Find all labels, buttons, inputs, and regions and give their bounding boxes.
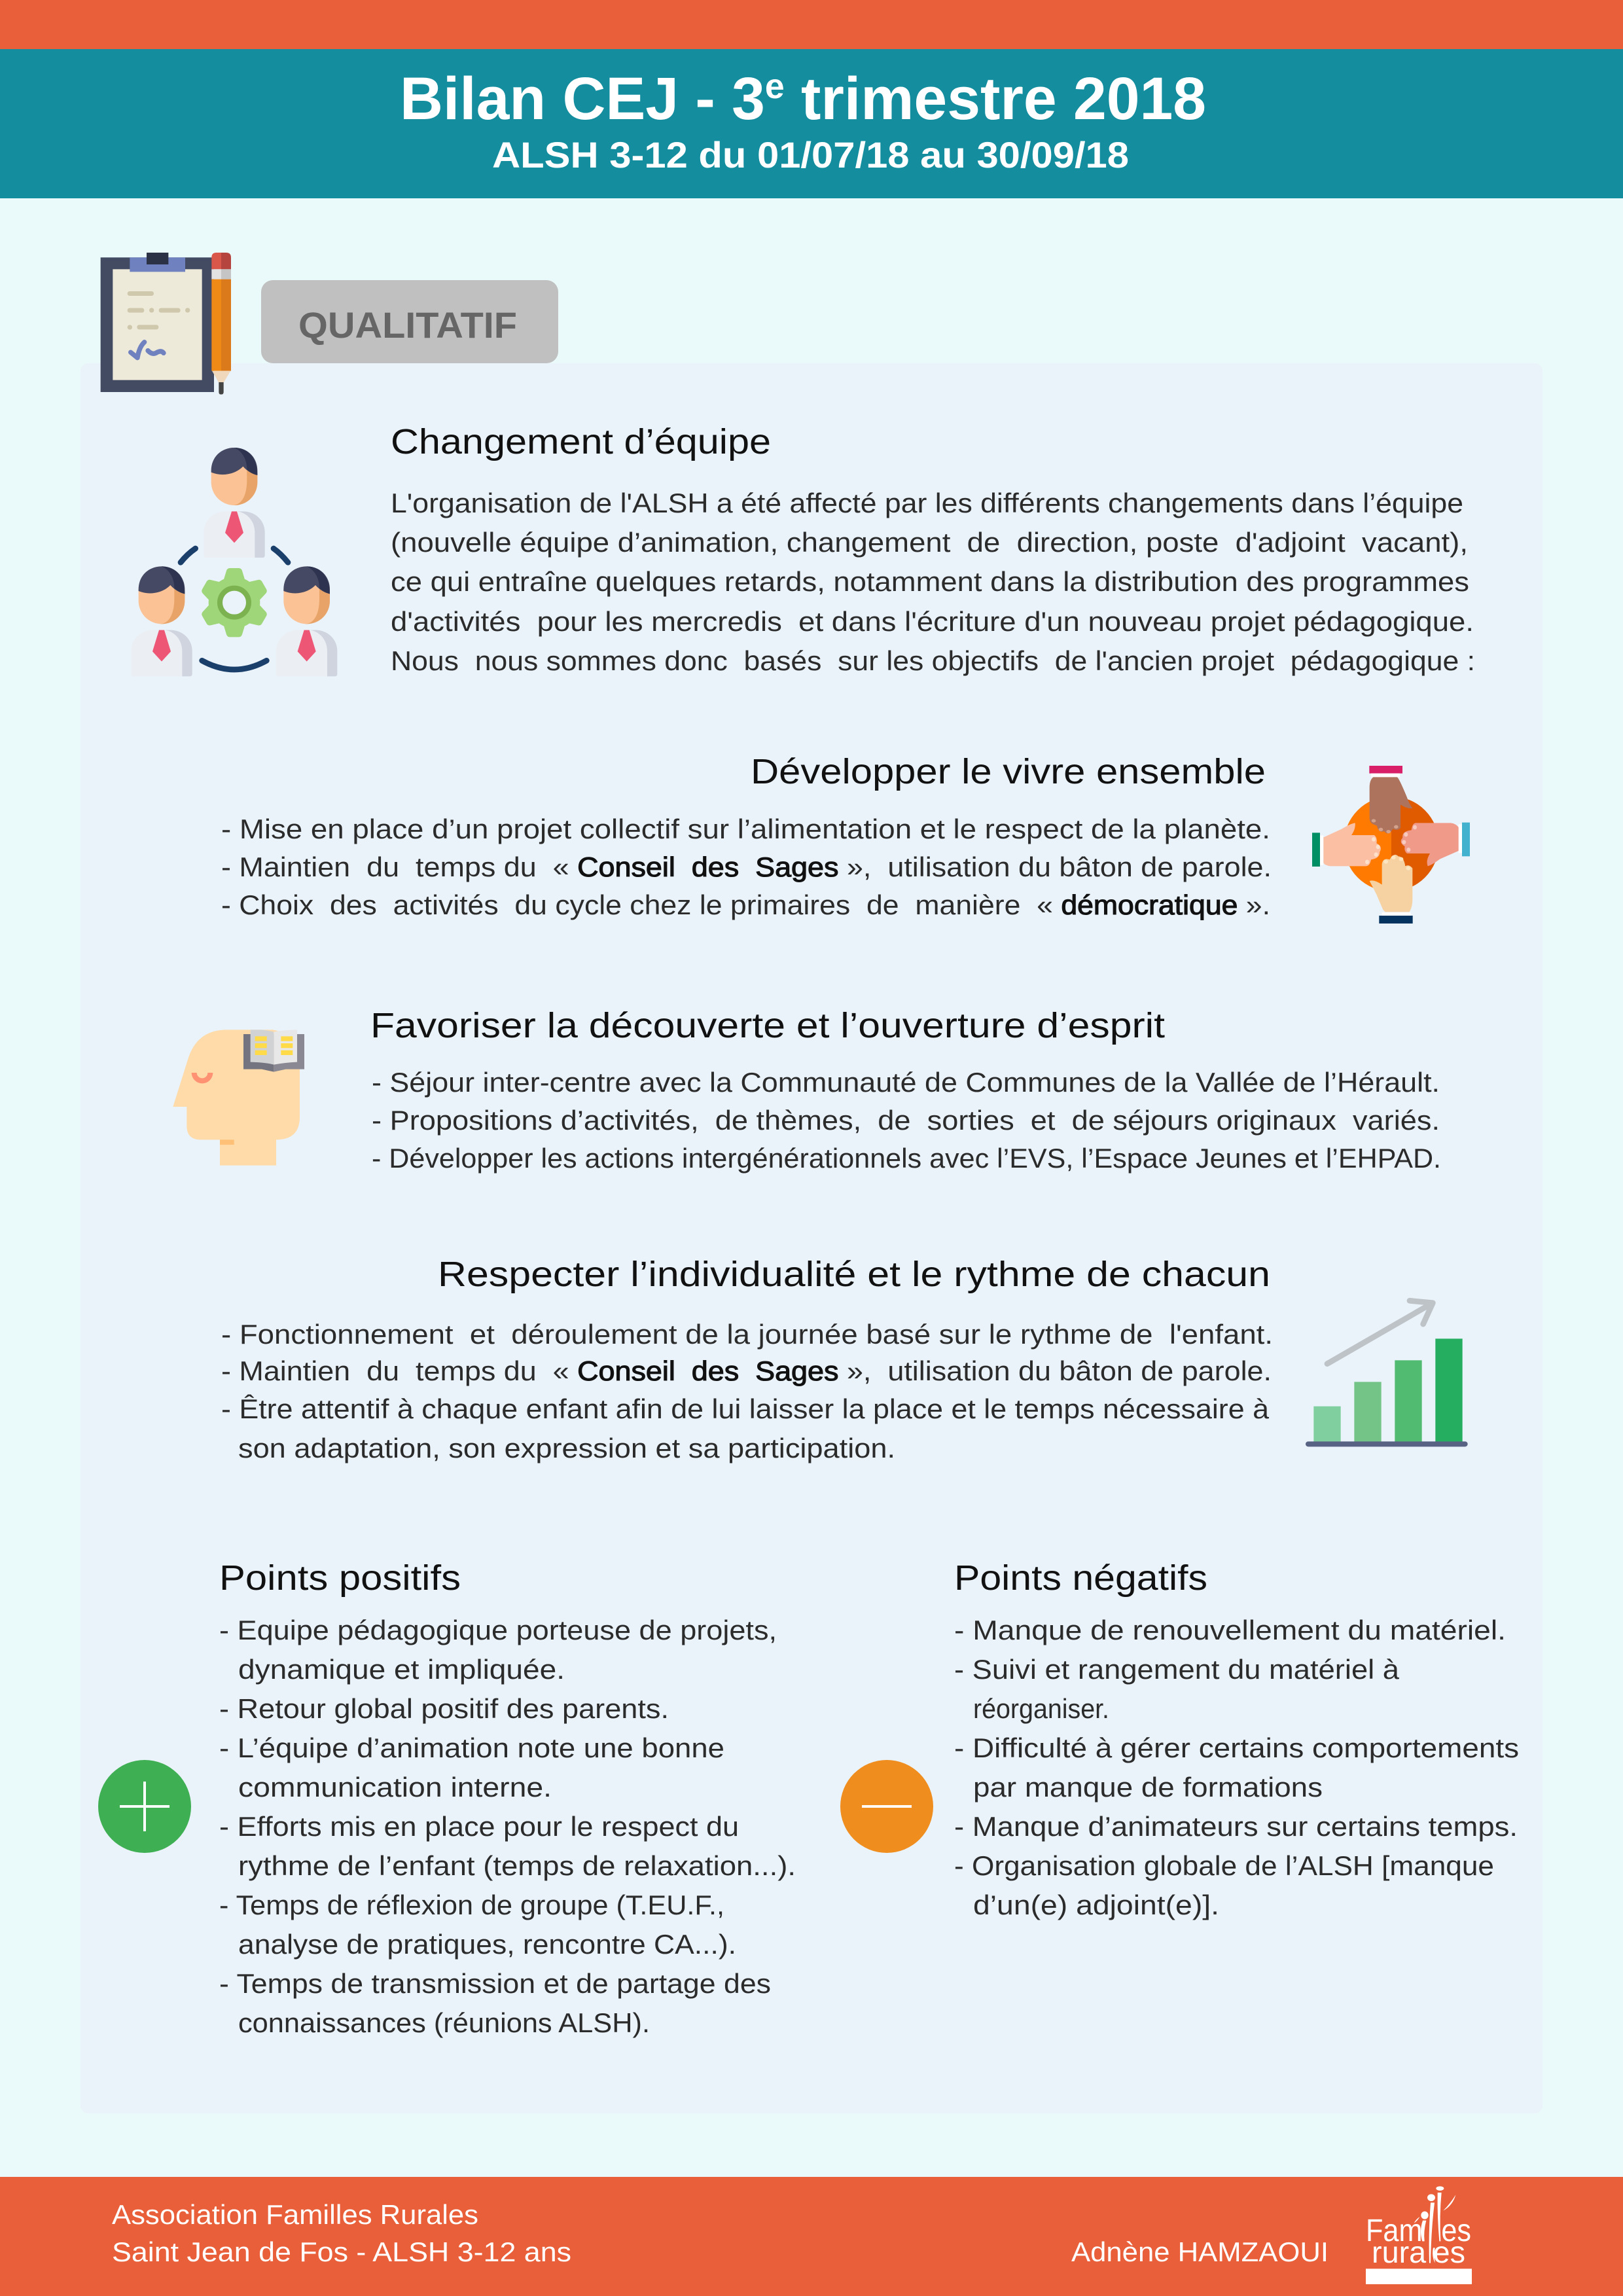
heading: Développer le vivre ensemble	[751, 752, 1266, 791]
bullet list: - Maintien du temps du « Conseil des Sages », utilisation du bâton de parole.	[221, 852, 1272, 882]
bullet list: - Propositions d’activités, de thèmes, de sorties et de séjours originaux variés.	[372, 1105, 1440, 1136]
logo	[1366, 2186, 1472, 2284]
points negatifs	[954, 1558, 1519, 1920]
list: - Efforts mis en place pour le respect du	[219, 1811, 739, 1842]
bullet list	[221, 814, 1272, 920]
heading: Favoriser la découverte et l’ouverture d’esprit	[370, 1006, 1165, 1045]
heading: Changement d’équipe	[391, 422, 771, 461]
list	[954, 1615, 1519, 1920]
list: - Temps de réflexion de groupe (T.EU.F.,	[219, 1890, 724, 1920]
logo: rurales	[1372, 2235, 1465, 2269]
paragraph: L'organisation de l'ALSH a été affecté par les différents changements dans l’équipe	[391, 488, 1463, 518]
qualitatif badge: QUALITATIF	[298, 304, 517, 346]
bullet list: - Maintien du temps du « Conseil des Sages », utilisation du bâton de parole.	[221, 1355, 1272, 1386]
icon: minus	[840, 1760, 933, 1853]
paragraph: (nouvelle équipe d’animation, changement de direction, poste d'adjoint vacant),	[391, 527, 1468, 558]
bullet list: - Développer les actions intergénérationnels avec l’EVS, l’Espace Jeunes et l’EHPAD.	[372, 1143, 1441, 1174]
author: Adnène HAMZAOUI	[1071, 2236, 1329, 2267]
list: communication interne.	[238, 1772, 552, 1803]
header banner	[0, 49, 1623, 198]
section: changement d'equipe	[391, 422, 1475, 676]
title: Bilan CEJ - 3	[400, 65, 768, 132]
title: e	[765, 67, 785, 106]
title: trimestre 2018	[785, 65, 1206, 132]
list: rythme de l’enfant (temps de relaxation...).	[238, 1850, 796, 1881]
bullet list: - Être attentif à chaque enfant afin de lui laisser la place et le temps nécessaire à	[221, 1393, 1270, 1424]
footer	[0, 2177, 1623, 2296]
points positifs	[219, 1558, 796, 2038]
list: - Equipe pédagogique porteuse de projets,	[219, 1615, 777, 1645]
paragraph: ce qui entraîne quelques retards, notamment dans la distribution des programmes	[391, 566, 1469, 597]
bullet list	[372, 1067, 1441, 1174]
top orange band	[0, 0, 1623, 49]
list: - Difficulté à gérer certains comportements	[954, 1732, 1519, 1763]
section: vivre ensemble	[221, 752, 1272, 920]
icon: team and gear	[131, 448, 337, 676]
icon: growth bar chart	[1306, 1300, 1468, 1446]
list: - L’équipe d’animation note une bonne	[219, 1732, 724, 1763]
list: - Manque de renouvellement du matériel.	[954, 1615, 1506, 1645]
icon: head with book	[173, 1030, 304, 1166]
bullet list: - Mise en place d’un projet collectif sur l’alimentation et le respect de la planète.	[221, 814, 1270, 844]
section: individualite	[221, 1255, 1273, 1463]
qualitatif badge	[261, 280, 558, 363]
list: connaissances (réunions ALSH).	[238, 2007, 650, 2038]
paragraph: d'activités pour les mercredis et dans l'écriture d'un nouveau projet pédagogique.	[391, 606, 1474, 637]
list: - Temps de transmission et de partage des	[219, 1968, 771, 1999]
list: - Manque d’animateurs sur certains temps.	[954, 1811, 1518, 1842]
location: Saint Jean de Fos - ALSH 3-12 ans	[112, 2236, 571, 2267]
logo: Familles	[1366, 2214, 1471, 2248]
heading: Points négatifs	[954, 1558, 1207, 1598]
icon: joined hands	[1312, 766, 1470, 924]
bullet list	[221, 1319, 1273, 1463]
paragraph: Nous nous sommes donc basés sur les objectifs de l'ancien projet pédagogique :	[391, 645, 1475, 676]
list: - Organisation globale de l’ALSH [manque	[954, 1850, 1494, 1881]
list: par manque de formations	[973, 1772, 1323, 1803]
icon: clipboard and pencil	[101, 253, 231, 395]
list: réorganiser.	[973, 1693, 1109, 1724]
subtitle: ALSH 3-12 du 01/07/18 au 30/09/18	[492, 134, 1129, 175]
list	[219, 1615, 796, 2038]
bullet list: son adaptation, son expression et sa participation.	[238, 1433, 895, 1463]
list: d’un(e) adjoint(e)].	[973, 1890, 1219, 1920]
list: dynamique et impliquée.	[238, 1654, 565, 1685]
heading: Points positifs	[219, 1558, 461, 1598]
list: - Suivi et rangement du matériel à	[954, 1654, 1400, 1685]
content panel	[80, 363, 1543, 2113]
bullet list: - Séjour inter-centre avec la Communauté de Communes de la Vallée de l’Hérault.	[372, 1067, 1440, 1098]
heading: Respecter l’individualité et le rythme de chacun	[438, 1255, 1270, 1294]
list: - Retour global positif des parents.	[219, 1693, 669, 1724]
icon: plus	[98, 1760, 191, 1853]
association name: Association Familles Rurales	[112, 2199, 478, 2230]
bullet list: - Choix des activités du cycle chez le primaires de manière « démocratique ».	[221, 889, 1270, 920]
paragraph	[391, 488, 1475, 676]
bullet list: - Fonctionnement et déroulement de la journée basé sur le rythme de l'enfant.	[221, 1319, 1273, 1350]
section: decouverte	[370, 1006, 1441, 1174]
list: analyse de pratiques, rencontre CA...).	[238, 1929, 736, 1960]
